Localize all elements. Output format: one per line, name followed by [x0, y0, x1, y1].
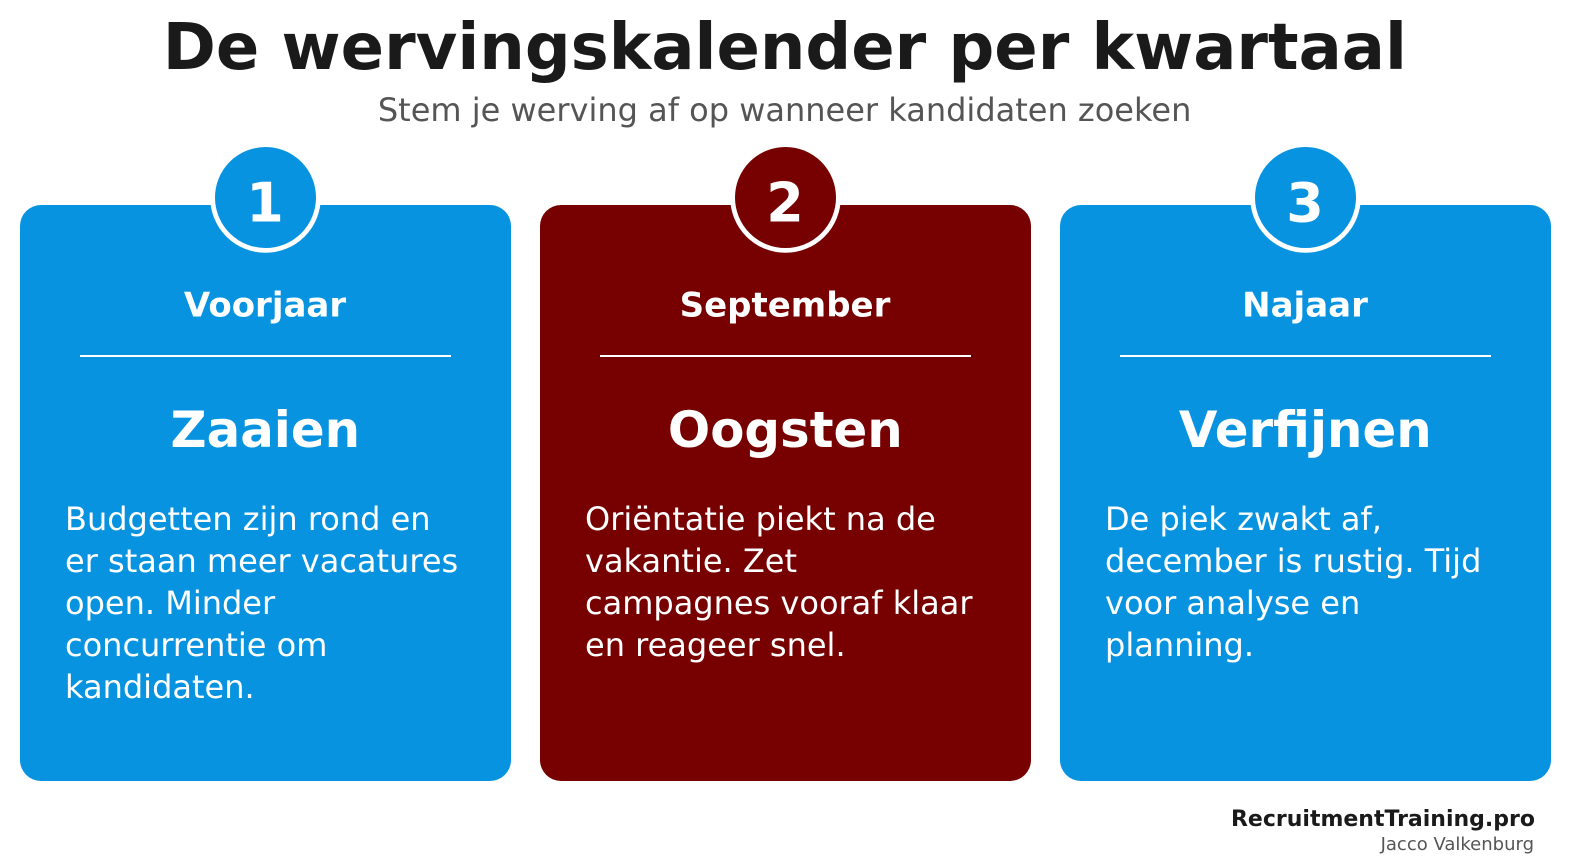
badge: 3 [1253, 145, 1358, 250]
footer brand: RecruitmentTraining.pro [1231, 807, 1535, 832]
title: De wervingskalender per kwartaal [163, 11, 1407, 85]
body text: december is rustig. Tijd [1105, 542, 1481, 580]
body text: concurrentie om [65, 626, 327, 664]
heading: Zaaien: Zaaien [170, 401, 360, 459]
body text: vakantie. Zet [585, 542, 797, 580]
badge: 2: 2 [766, 172, 804, 235]
subtitle: Stem je werving af op wanneer kandidaten zoeken [378, 91, 1191, 129]
body text: Budgetten zijn rond en [65, 500, 431, 538]
body text: De piek zwakt af, [1105, 500, 1382, 538]
panel: Voorjaar [20, 145, 511, 781]
body text: open. Minder [65, 584, 276, 622]
body text: voor analyse en [1105, 584, 1360, 622]
body text: planning. [1105, 626, 1254, 664]
body text: kandidaten. [65, 668, 255, 706]
badge: 3: 3 [1286, 172, 1324, 235]
panel: September [540, 145, 1031, 781]
badge: 2 [733, 145, 838, 250]
period: Voorjaar: Voorjaar [184, 286, 346, 326]
body text: er staan meer vacatures [65, 542, 458, 580]
body text: campagnes vooraf klaar [585, 584, 973, 622]
period: Najaar: Najaar [1242, 286, 1368, 326]
body text: en reageer snel. [585, 626, 846, 664]
footer author: Jacco Valkenburg [1380, 834, 1534, 855]
heading: Verfijnen: Verfijnen [1179, 401, 1432, 459]
period: September: September [680, 286, 891, 326]
panel: Najaar [1060, 145, 1551, 781]
badge: 1: 1 [246, 172, 284, 235]
heading: Oogsten: Oogsten [668, 401, 903, 459]
badge: 1 [213, 145, 318, 250]
body text: Oriëntatie piekt na de [585, 500, 936, 538]
